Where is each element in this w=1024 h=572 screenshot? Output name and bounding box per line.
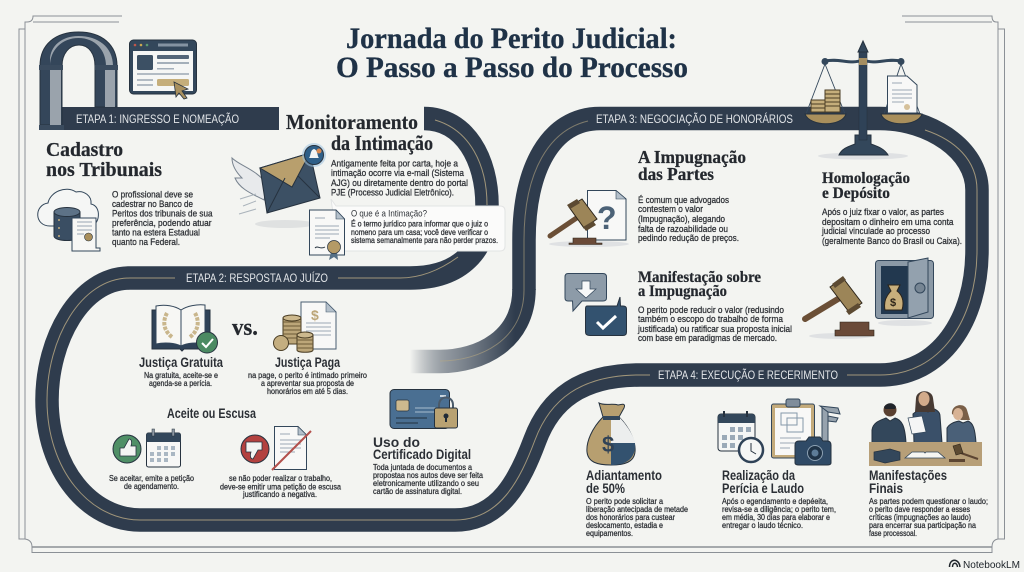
icon: clipboard and plans	[772, 399, 814, 458]
justiça gratuita text: Na gratuita, aceite-se e	[144, 370, 218, 380]
text block: cartão de assinatura digital.	[373, 486, 462, 496]
panel: monitoramento da intimação	[232, 110, 505, 260]
text block: Antigamente feita por carta, hoje a	[331, 158, 459, 170]
icon: notification bell	[302, 143, 326, 167]
justiça paga text	[248, 355, 367, 396]
panel: realização da perícia e laudo	[718, 399, 840, 530]
text block	[637, 305, 792, 344]
text block: fase processoal.	[869, 528, 917, 538]
icon: open book with check	[152, 305, 218, 353]
icon: gavel and question document	[549, 190, 629, 247]
text block: liberação antecipada de metade	[586, 504, 688, 514]
heading: Cadastro	[46, 139, 123, 161]
title: O Passo a Passo do Processo	[336, 51, 688, 84]
text block: Realização da	[722, 468, 795, 483]
text block: (Impugnação), alegando	[638, 214, 725, 225]
title	[336, 22, 688, 84]
icon: crossed out document	[272, 426, 311, 470]
accept text: de agendamento.	[124, 481, 179, 491]
text block: PJE (Processo Judicial Eletrônico).	[331, 188, 454, 198]
callout: o que é a intimação: O que é a Intimação?	[351, 208, 427, 220]
accept text	[109, 473, 194, 491]
vs label: vs.	[232, 315, 258, 341]
heading	[638, 269, 761, 300]
text block: Perícia e Laudo	[722, 481, 804, 496]
panel: uso do certificado digital	[373, 390, 483, 496]
text block: AJG) ou diretamente dentro do portal	[331, 178, 468, 189]
justiça paga text: honorários em até 5 dias.	[267, 386, 348, 396]
text block: equipamentos.	[586, 528, 633, 538]
text block: intimação ocorre via e-mail (Sistema	[331, 168, 465, 179]
text block	[112, 190, 213, 248]
text block: deslocamento, estadia e	[586, 520, 663, 530]
stage 4 label: ETAPA 4: EXECUÇÃO E RECERIMENTO	[658, 368, 838, 382]
decline text: se não poder realizar o trabalho,	[229, 473, 332, 483]
icon: thumbs up	[113, 435, 141, 463]
panel: justiça gratuita vs paga	[139, 302, 367, 396]
icon: meeting of lawyers	[869, 391, 982, 466]
text block: Uso do	[373, 435, 420, 450]
stage 2 label: ETAPA 2: RESPOSTA AO JUÍZO	[186, 270, 328, 285]
callout: o que é a intimação	[331, 199, 505, 251]
text block	[869, 468, 988, 538]
text block: com base em paradigmas de mercado.	[638, 333, 777, 344]
icon: cloud database	[38, 189, 100, 251]
callout: o que é a intimação: É o termo jurídico para informar que o juiz o	[351, 218, 488, 228]
text block	[638, 195, 739, 244]
stage 3 label: ETAPA 3: NEGOCIAÇÃO DE HONORÁRIOS	[596, 111, 793, 126]
text block: críticas (impugnações ao laudo)	[869, 512, 971, 522]
decline text	[220, 473, 341, 499]
justiça gratuita text	[139, 355, 223, 388]
callout: o que é a intimação: sistema semanalmente para não perder prazos.	[351, 235, 498, 245]
text block: cadestrar no Banco de	[112, 199, 193, 210]
text block: É comum que advogados	[638, 195, 729, 206]
text block: contestem o valor	[638, 204, 703, 215]
icon: speech bubbles	[565, 274, 626, 336]
justiça gratuita text: agenda-se a perícia.	[149, 378, 212, 388]
panel: manifestação sobre a impugnação	[565, 269, 792, 344]
stage 1 label: ETAPA 1: INGRESSO E NOMEAÇÃO	[76, 112, 239, 126]
text block: dos honorários para custear	[586, 512, 675, 522]
icon: coins and fee document: $	[311, 307, 319, 323]
panel: manifestações finais	[869, 391, 988, 538]
panel: aceite ou escusa	[109, 406, 341, 499]
text block: Finais	[869, 481, 903, 496]
heading	[46, 139, 162, 181]
justiça paga text: a apreventar sua proposta de	[261, 378, 354, 388]
panel: adiantamento de 50%	[586, 403, 688, 538]
text block	[821, 207, 962, 247]
text block: Após o juiz fixar o valor, as partes	[822, 207, 944, 218]
accept text: Se aceitar, emite a petição	[109, 473, 194, 483]
icon: camera	[795, 437, 831, 465]
icon: calendar	[146, 429, 180, 467]
icon: gavel on block	[805, 276, 874, 339]
panel: a impugnação das partes	[549, 147, 746, 247]
heading: a Impugnação	[638, 283, 727, 300]
panel: cadastro nos tribunais	[38, 139, 213, 251]
text block: O perito pode solicitar a	[586, 496, 663, 506]
text block	[331, 158, 468, 198]
icon: browser window	[130, 40, 196, 99]
heading: nos Tribunais	[46, 159, 162, 181]
text block: Peritos dos tribunais de sua	[112, 208, 213, 220]
panel: homologação e depósito	[805, 170, 962, 339]
text block: As partes podem questionar o laudo;	[869, 496, 988, 506]
justiça paga text: Justiça Paga	[275, 355, 340, 370]
icon: winged envelope	[232, 153, 320, 228]
heading: Homologação	[822, 170, 910, 187]
heading	[286, 110, 433, 155]
icon: document with seal	[310, 210, 344, 260]
text block: Após o egendamento e depéeita,	[722, 496, 828, 506]
text block: de 50%	[586, 481, 625, 496]
icon: calendar and clock	[718, 411, 763, 462]
decline text: justificando a negativa.	[242, 489, 317, 499]
heading: Aceite ou Escusa	[167, 406, 256, 421]
text block: pedindo redução de preços.	[638, 233, 739, 244]
icon: balance scale	[805, 41, 922, 160]
text block: quanto na Federal.	[112, 237, 180, 248]
text block: (geralmente Banco do Brasil ou Caixa).	[822, 236, 962, 247]
heading: Monitoramento	[286, 110, 418, 134]
text block: revisa-se a diligência; o perito tem,	[722, 504, 836, 514]
icon: caliper	[820, 406, 840, 448]
icon: smart card and padlock	[390, 390, 458, 428]
winding path road	[47, 107, 977, 520]
text block: entregar o laudo técnico.	[722, 520, 803, 530]
icon: gavel and question document: ?	[597, 200, 617, 236]
text block: em média, 30 dias para elaborar e	[722, 512, 830, 522]
decline text: deve-se emitir uma petição de escusa	[220, 482, 341, 492]
text block: eletronicamente utilizando o seu	[373, 478, 479, 488]
heading	[822, 170, 910, 202]
text block: Manifestações	[869, 468, 947, 483]
icon: thumbs down	[241, 435, 269, 463]
text block: Adiantamento	[586, 468, 662, 483]
text block	[722, 468, 836, 530]
heading: A Impugnação	[638, 147, 746, 167]
text block: O perito pode reducir o valor (redusindo	[638, 305, 784, 316]
text block: preferência, podendo atuar	[112, 218, 212, 229]
icon: safe with money bag: $	[890, 297, 896, 309]
icon: safe with money bag	[876, 258, 934, 326]
text block: para encerrar sua participação na	[869, 520, 976, 530]
text block: justificada) ou ratificar sua proposta inicial	[637, 324, 792, 335]
text block: Certificado Digital	[373, 447, 471, 462]
text block: também o escopo do trabalho de forma	[638, 314, 784, 325]
heading	[638, 147, 746, 184]
text block: o perito dave responder a esses	[869, 504, 970, 514]
title: Jornada do Perito Judicial:	[346, 22, 677, 55]
text block: tanto na estera Estadual	[112, 228, 200, 238]
text block	[373, 435, 483, 496]
text block: propostaa nos autos deve ser feita	[373, 470, 483, 480]
text block: falta de razoabilidade ou	[638, 224, 728, 235]
text block	[586, 468, 688, 538]
icon: money bag: $	[602, 432, 614, 457]
justiça gratuita text: Justiça Gratuita	[139, 355, 223, 370]
callout: o que é a intimação: nomeno para um casa; você deve verificar o	[351, 227, 488, 237]
notebooklm logo: NotebookLM	[963, 559, 1020, 571]
text block: Toda juntada de documentos a	[373, 462, 472, 472]
text block: O profissional deve se	[112, 190, 193, 200]
text block: judicial vinculade ao processo	[821, 226, 930, 237]
heading: e Depósito	[822, 185, 890, 202]
icon: coins and fee document	[274, 302, 336, 352]
heading: das Partes	[638, 164, 714, 184]
heading: da Intimação	[331, 131, 433, 155]
icon: courthouse arch	[39, 32, 118, 130]
heading: Manifestação sobre	[638, 269, 761, 286]
justiça paga text: na page, o perito é intimado primeiro	[248, 370, 367, 380]
text block: depositam o dinheiro em uma conta	[822, 217, 954, 228]
